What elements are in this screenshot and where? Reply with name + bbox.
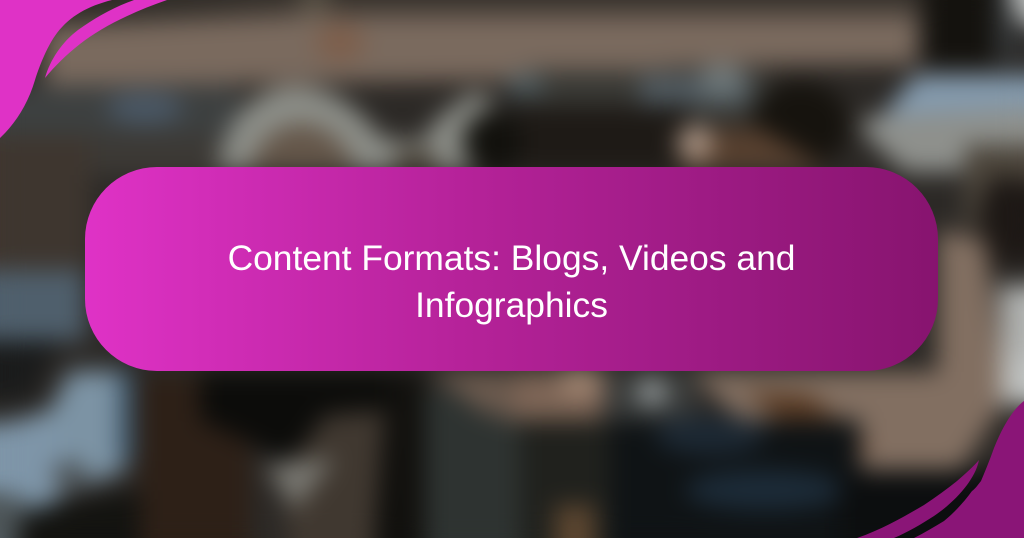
head left bbox=[218, 86, 492, 170]
black shirt bbox=[200, 372, 395, 538]
centre wall bbox=[530, 70, 770, 120]
centre bottom bbox=[512, 372, 610, 420]
grey-teal figure bbox=[425, 390, 525, 538]
shape: top-left corner swoosh bbox=[0, 0, 167, 138]
title bbox=[228, 238, 795, 325]
top wall band bbox=[0, 0, 1024, 12]
brown jacket bbox=[140, 375, 250, 538]
right window bbox=[880, 75, 1024, 118]
shape: bottom-right corner swoosh bbox=[857, 401, 1024, 538]
bottom left blue bbox=[0, 270, 85, 340]
title banner bbox=[85, 167, 938, 371]
title: Content Formats: Blogs, Videos and bbox=[228, 238, 795, 278]
dark head right bbox=[750, 81, 850, 169]
tan arm bbox=[280, 410, 385, 538]
right figure bbox=[690, 230, 1005, 470]
title: Infographics bbox=[415, 285, 608, 325]
mid wall row bbox=[0, 85, 240, 140]
